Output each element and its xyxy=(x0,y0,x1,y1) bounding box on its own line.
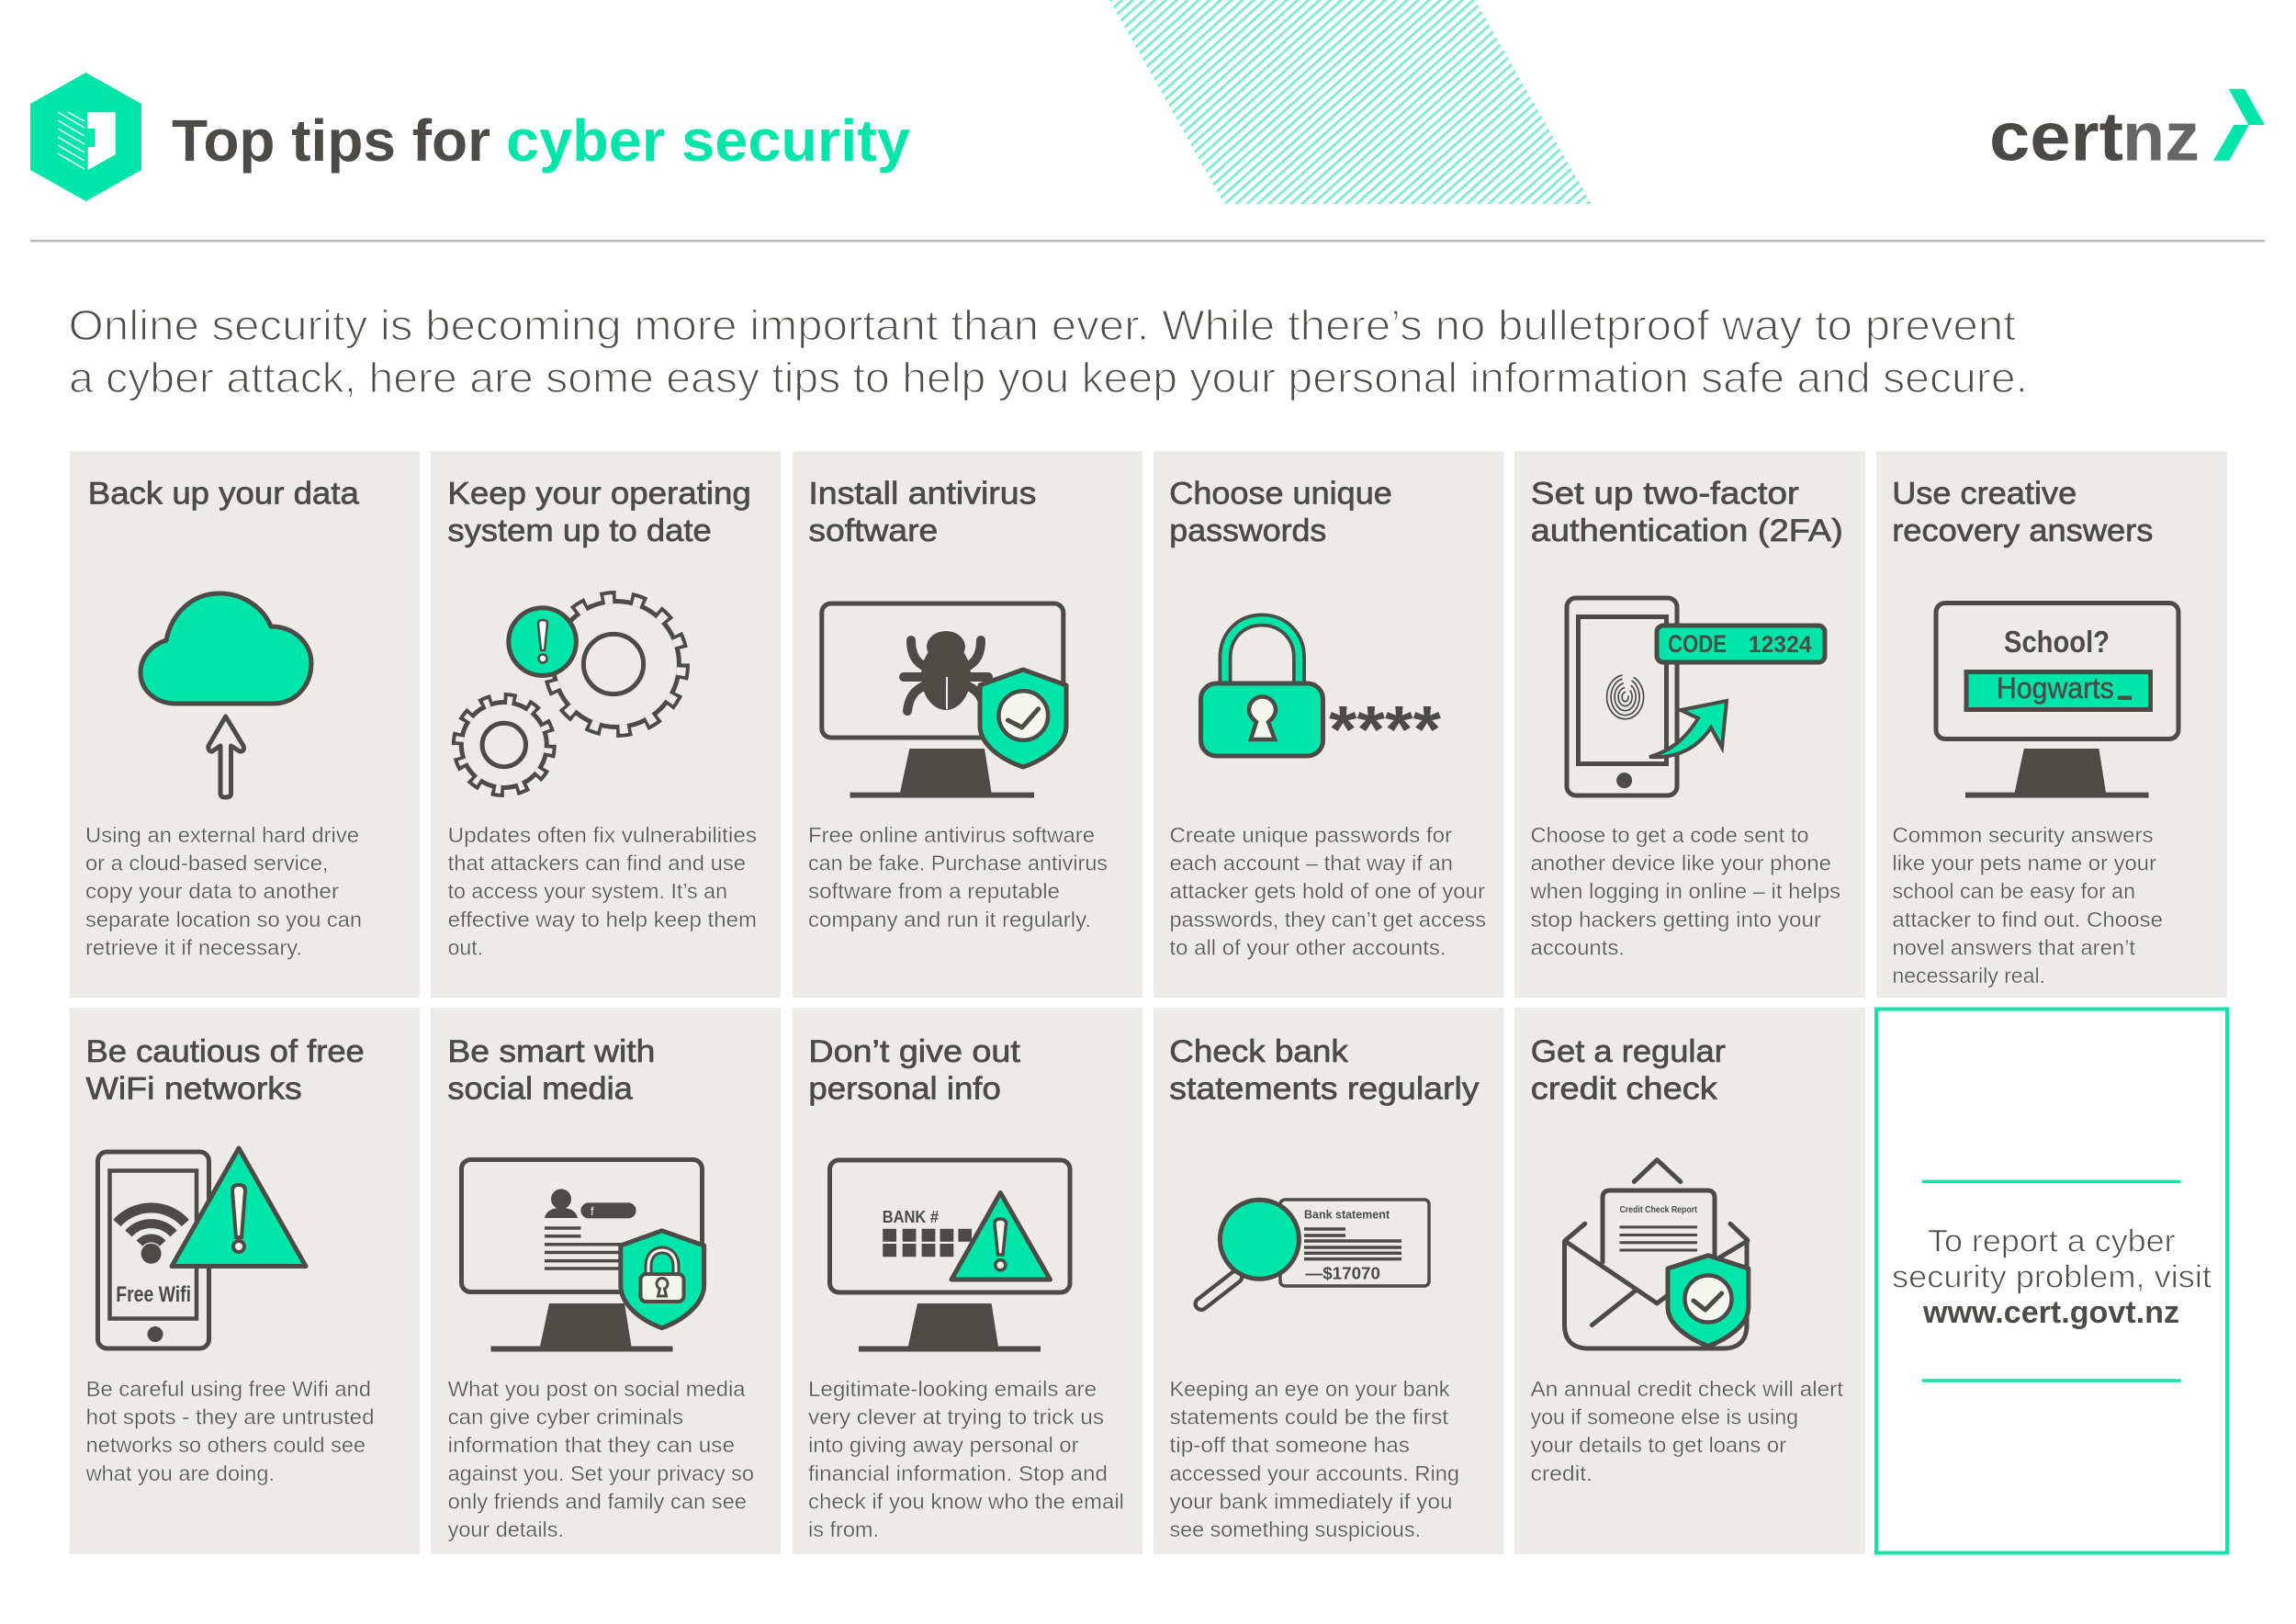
body text: your details to get loans or xyxy=(1530,1433,1786,1457)
body text: only friends and family can see xyxy=(448,1489,747,1513)
icon: monitor with bank number warning: BANK # xyxy=(883,1208,939,1226)
body text xyxy=(448,1377,754,1541)
heading: Get a regular xyxy=(1531,1034,1726,1069)
body text: An annual credit check will alert xyxy=(1530,1377,1844,1401)
heading xyxy=(447,1034,655,1106)
title: Top tips for xyxy=(172,107,490,174)
heading xyxy=(86,1034,365,1106)
body text: into giving away personal or xyxy=(808,1433,1079,1457)
body text: What you post on social media xyxy=(448,1377,746,1401)
body text: to all of your other accounts. xyxy=(1170,935,1446,959)
body text xyxy=(1170,1377,1459,1541)
heading xyxy=(1531,1034,1726,1106)
heading: system up to date xyxy=(447,513,712,548)
body text: statements could be the first xyxy=(1170,1405,1449,1429)
body text: against you. Set your privacy so xyxy=(448,1461,754,1485)
icon: padlock and asterisks xyxy=(1201,620,1441,767)
body text: effective way to help keep them xyxy=(448,908,757,931)
icon: phone with code and arrow xyxy=(1567,598,1825,795)
panel: install antivirus software xyxy=(793,451,1142,998)
body text: Be careful using free Wifi and xyxy=(86,1377,371,1401)
title xyxy=(172,107,910,174)
body text: Common security answers xyxy=(1892,823,2154,847)
icon: monitor with bug and shield xyxy=(822,603,1066,798)
body text: attacker gets hold of one of your xyxy=(1170,879,1485,903)
certnz logo: cert xyxy=(1989,97,2123,175)
body text: Choose to get a code sent to xyxy=(1530,823,1809,847)
body text: Create unique passwords for xyxy=(1170,823,1452,847)
body text: Free online antivirus software xyxy=(808,823,1095,847)
body text: out. xyxy=(448,935,483,959)
icon: envelope with credit report and shield: Credit Check Report xyxy=(1620,1205,1698,1215)
icon: magnifier over bank statement xyxy=(1201,1200,1429,1304)
heading: Don’t give out xyxy=(808,1034,1020,1069)
body text: Legitimate-looking emails are xyxy=(808,1377,1097,1401)
icon: phone with wifi warning: Free Wifi xyxy=(116,1282,191,1307)
icon: monitor with profile and locked shield: f xyxy=(591,1204,594,1218)
heading: Install antivirus xyxy=(808,476,1036,511)
body text xyxy=(808,823,1108,931)
heading: Set up two-factor xyxy=(1531,476,1799,511)
body text: copy your data to another xyxy=(85,879,339,903)
panel: set up two-factor authentication xyxy=(1514,451,1865,998)
intro text: a cyber attack, here are some easy tips to help you keep your personal information safe and secure. xyxy=(69,354,2028,401)
body text: when logging in online – it helps xyxy=(1529,879,1840,903)
panel: don't give out personal info xyxy=(793,1008,1142,1554)
heading xyxy=(808,476,1036,548)
intro text xyxy=(68,301,2028,401)
body text: can give cyber criminals xyxy=(448,1405,683,1429)
icon: monitor with school question: Hogwarts xyxy=(1997,671,2114,705)
heading xyxy=(808,1034,1020,1106)
panel: check bank statements regularly xyxy=(1154,1008,1504,1554)
panel: choose unique passwords xyxy=(1154,451,1504,998)
body text: credit. xyxy=(1530,1461,1593,1485)
body text: Using an external hard drive xyxy=(85,823,359,847)
heading: Be smart with xyxy=(447,1034,655,1069)
icon: magnifier over bank statement: Bank statement xyxy=(1304,1207,1390,1221)
body text: hot spots - they are untrusted xyxy=(86,1405,374,1429)
body text: can be fake. Purchase antivirus xyxy=(808,851,1108,875)
icon: phone with code and arrow: CODE xyxy=(1668,630,1727,658)
body text: Updates often fix vulnerabilities xyxy=(448,823,757,847)
icon: magnifier over bank statement: —$17070 xyxy=(1305,1264,1380,1282)
body text: to access your system. It’s an xyxy=(448,879,727,903)
body text xyxy=(85,1377,374,1485)
heading: Keep your operating xyxy=(447,476,751,511)
icon: monitor with bank number warning xyxy=(830,1160,1070,1352)
body text: stop hackers getting into your xyxy=(1530,908,1821,931)
heading xyxy=(1531,476,1843,548)
body text: financial information. Stop and xyxy=(808,1461,1108,1485)
body text: you if someone else is using xyxy=(1530,1405,1798,1429)
body text: separate location so you can xyxy=(85,908,362,931)
body text: networks so others could see xyxy=(86,1433,366,1457)
panel: be cautious of free wifi xyxy=(70,1008,420,1554)
heading: WiFi networks xyxy=(85,1071,302,1106)
body text: Keeping an eye on your bank xyxy=(1170,1377,1450,1401)
certnz logo: nz xyxy=(2122,97,2200,175)
icon: monitor with school question: School? xyxy=(2004,625,2110,659)
panel: report callout xyxy=(1876,1009,2227,1552)
heading xyxy=(1892,476,2153,548)
body text xyxy=(1170,823,1486,959)
body text xyxy=(1530,1377,1844,1485)
body text: each account – that way if an xyxy=(1170,851,1453,875)
heading: recovery answers xyxy=(1892,513,2153,548)
icon: hexagon shield logo xyxy=(30,73,141,201)
body text: another device like your phone xyxy=(1530,851,1831,875)
icon: cloud upload xyxy=(141,593,311,797)
heading: Use creative xyxy=(1892,476,2077,511)
title: cyber security xyxy=(506,107,910,174)
body text: retrieve it if necessary. xyxy=(85,935,302,959)
panel: use creative recovery answers xyxy=(1876,451,2227,998)
body text: what you are doing. xyxy=(85,1461,275,1485)
body text xyxy=(448,823,757,959)
callout text: www.cert.govt.nz xyxy=(1922,1295,2179,1330)
heading: authentication (2FA) xyxy=(1531,513,1843,548)
icon: monitor with school question xyxy=(1936,603,2178,798)
body text: software from a reputable xyxy=(808,879,1060,903)
body text xyxy=(1892,823,2163,987)
body text: novel answers that aren’t xyxy=(1892,935,2136,959)
body text xyxy=(85,823,362,959)
icon: padlock and asterisks: **** xyxy=(1329,694,1441,767)
body text xyxy=(808,1377,1124,1541)
heading: credit check xyxy=(1531,1071,1718,1106)
heading xyxy=(1169,476,1392,548)
hatched decorative parallelogram xyxy=(1109,0,1592,204)
body text: like your pets name or your xyxy=(1892,851,2156,875)
body text: see something suspicious. xyxy=(1170,1517,1421,1541)
body text: accessed your accounts. Ring xyxy=(1170,1461,1459,1485)
panel: keep your operating system up to date xyxy=(431,451,781,998)
heading: Be cautious of free xyxy=(85,1034,365,1069)
heading: statements regularly xyxy=(1169,1071,1479,1106)
body text: your bank immediately if you xyxy=(1170,1489,1453,1513)
body text: your details. xyxy=(448,1517,564,1541)
icon: phone with code and arrow: 12324 xyxy=(1749,632,1812,658)
heading: passwords xyxy=(1169,513,1326,548)
panel: be smart with social media xyxy=(431,1008,781,1554)
callout text xyxy=(1892,1224,2212,1330)
body text: accounts. xyxy=(1530,935,1625,959)
body text: attacker to find out. Choose xyxy=(1892,908,2163,931)
intro text: Online security is becoming more important than ever. While there’s no bulletproof way to prevent xyxy=(68,301,2016,349)
body text: necessarily real. xyxy=(1892,964,2045,987)
body text: passwords, they can’t get access xyxy=(1170,908,1486,931)
heading xyxy=(1169,1034,1479,1106)
body text xyxy=(1529,823,1840,959)
heading: Choose unique xyxy=(1169,476,1392,511)
icon: monitor with profile and locked shield xyxy=(461,1159,704,1352)
body text: or a cloud-based service, xyxy=(85,851,329,875)
callout text: security problem, visit xyxy=(1892,1260,2212,1295)
body text: is from. xyxy=(808,1517,879,1541)
panel: get a regular credit check xyxy=(1514,1008,1865,1554)
certnz logo xyxy=(1989,89,2265,175)
heading: social media xyxy=(447,1071,633,1106)
panel: back up your data xyxy=(70,451,420,998)
heading: Back up your data xyxy=(88,476,359,511)
heading: Check bank xyxy=(1169,1034,1349,1069)
body text: school can be easy for an xyxy=(1892,879,2135,903)
icon: envelope with credit report and shield xyxy=(1565,1160,1749,1348)
body text: check if you know who the email xyxy=(808,1489,1124,1513)
heading: software xyxy=(808,513,938,548)
callout text: To report a cyber xyxy=(1928,1224,2176,1259)
heading: personal info xyxy=(808,1071,1001,1106)
icon: gears with alert xyxy=(456,595,685,794)
body text: company and run it regularly. xyxy=(808,908,1091,931)
heading xyxy=(447,476,751,548)
body text: very clever at trying to trick us xyxy=(808,1405,1104,1429)
body text: information that they can use xyxy=(448,1433,735,1457)
icon: phone with wifi warning xyxy=(97,1148,306,1348)
body text: that attackers can find and use xyxy=(448,851,746,875)
body text: tip-off that someone has xyxy=(1170,1433,1410,1457)
